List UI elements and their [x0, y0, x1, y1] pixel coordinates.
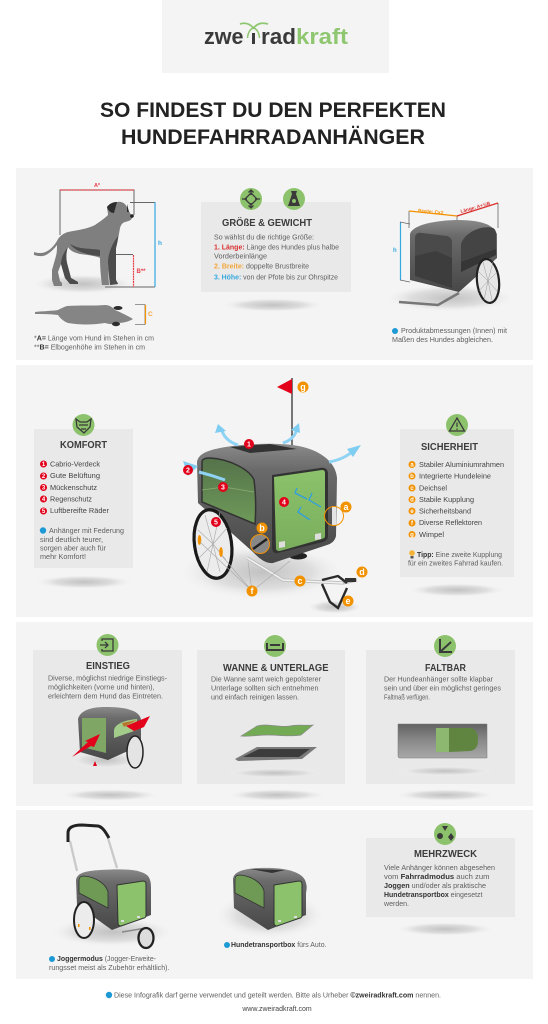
jogger mode trailer: [50, 825, 174, 948]
comfort list: [40, 460, 110, 515]
comfort box: [34, 414, 133, 568]
safety list: b: [410, 474, 414, 480]
dog body: [34, 202, 132, 286]
text: Unterlage sollten sich entnehmen: [211, 684, 318, 692]
size instructions: So wählst du die richtige Größe:: [214, 232, 314, 242]
comfort list: 2: [42, 474, 46, 480]
safety list: [408, 460, 504, 539]
letter markers: c: [297, 576, 303, 586]
heading: FALTBAR: [425, 662, 466, 674]
trailer with dimensions: [384, 200, 516, 312]
dog side view with measurements: [31, 183, 162, 294]
side mesh window: [202, 458, 256, 524]
letter markers: g: [300, 382, 306, 392]
pad: [241, 725, 313, 736]
note: suspension: Anhänger mit Federung: [49, 526, 124, 535]
title: HUNDEFAHRRADANHÄNGER: [121, 126, 425, 149]
safety list: Integrierte Hundeleine: [419, 472, 491, 480]
dog side view with measurements: h: [158, 240, 162, 247]
text: Faltmaß verfügen.: [384, 692, 430, 702]
text: sein und über ein möglichst geringes: [384, 684, 501, 692]
tip: [408, 550, 503, 568]
safety list: e: [410, 509, 414, 515]
note: suspension: [40, 526, 124, 561]
number markers: [183, 439, 289, 527]
text: Hundetransportbox eingesetzt: [384, 890, 483, 899]
note: suspension: mehr Komfort!: [40, 552, 86, 561]
safety box: [400, 414, 514, 577]
note: jogger mode: rungsset meist als Zubehör erhältlich).: [49, 963, 170, 972]
number markers: 1: [247, 442, 251, 448]
note: jogger mode: [49, 954, 170, 972]
icon: warning: [446, 414, 468, 436]
text: [383, 863, 495, 908]
text: [48, 674, 168, 700]
letter markers: b: [259, 523, 265, 533]
text: [211, 674, 322, 702]
safety list: d: [410, 498, 414, 504]
heading: EINSTIEG: [86, 660, 130, 672]
size instructions: 2. Breite: doppelte Brustbreite: [214, 262, 309, 270]
icon: entry: [96, 634, 118, 656]
shadow under safety box: [407, 583, 507, 597]
card: foldable: [366, 635, 515, 784]
safety list: Diverse Reflektoren: [419, 518, 482, 527]
title: [100, 99, 446, 149]
comfort list: Gute Belüftung: [50, 471, 100, 480]
shadow inside tub card: [225, 768, 325, 778]
folded trailer: [398, 724, 487, 758]
trailer with entry arrows: [69, 707, 150, 769]
measurement footnotes: **B= Elbogenhöhe im Stehen in cm: [34, 342, 145, 352]
text: werden.: [383, 899, 409, 908]
letter markers: f: [250, 586, 254, 596]
safety list: Sicherheitsband: [419, 506, 471, 516]
size instructions: Vorderbeinlänge: [214, 252, 267, 260]
aluminium frame detail: [332, 507, 336, 525]
note: product dimensions: Produktabmessungen (Innen) mit: [401, 326, 507, 335]
shadow under foldable card: [395, 789, 495, 801]
text: vom Fahrradmodus auch zum: [384, 872, 490, 881]
safety list: Stabile Kupplung: [419, 495, 474, 504]
comfort list: 4: [42, 497, 46, 503]
tip: für ein zweites Fahrrad kaufen.: [408, 558, 503, 568]
letter markers: e: [345, 596, 351, 606]
text: erleichtern dem Hund das Eintreten.: [48, 692, 163, 700]
safety list: a: [410, 462, 414, 468]
note: jogger mode: Joggermodus (Jogger-Erweite-: [57, 954, 157, 963]
trailer with dimensions: Breite: Cx2: [418, 208, 444, 216]
front rain cover: [272, 468, 328, 553]
note: product dimensions: [392, 326, 507, 344]
transport box trailer: [214, 868, 326, 939]
safety list: g: [410, 532, 414, 538]
note: suspension: sorgen aber auch für: [40, 544, 107, 552]
note: transport box: Hundetransportbox fürs Auto.: [231, 940, 326, 949]
letter markers: a: [343, 502, 349, 512]
pennant: [277, 378, 292, 445]
text: möglichkeiten (vorne und hinten),: [48, 682, 154, 692]
info box: size and weight: [201, 188, 351, 292]
comfort list: Luftbereifte Räder: [50, 506, 110, 515]
safety list: Deichsel: [419, 484, 447, 492]
measurement footnotes: [34, 334, 154, 352]
icon: weight: [283, 188, 305, 210]
airflow arrows: [199, 428, 354, 480]
text: [384, 674, 501, 702]
size instructions: [214, 232, 339, 282]
text: Joggen und/oder als praktische: [384, 881, 486, 890]
icon: fold: [434, 635, 456, 657]
reflectors: [198, 535, 223, 557]
heading: MEHRZWECK: [414, 848, 477, 860]
comfort list: Cabrio-Verdeck: [50, 460, 100, 468]
text: und einfach reinigen lassen.: [211, 692, 299, 702]
dog top view with width: C: [148, 311, 153, 318]
panel: entry, tub, foldable: [16, 622, 533, 806]
icon: dog face: [72, 414, 94, 436]
comfort list: 5: [42, 509, 46, 515]
safety list: f: [411, 521, 414, 527]
safety list: Stabiler Aluminiumrahmen: [419, 460, 504, 469]
logo wordmark: kraft: [296, 24, 349, 49]
shadow under tub card: [227, 789, 327, 801]
comfort list: 1: [42, 462, 46, 468]
card: entry: [33, 634, 182, 784]
footer url: www.zweiradkraft.com: [241, 1004, 312, 1013]
panel: comfort and safety: [16, 365, 533, 617]
safety list: Wimpel: [419, 530, 444, 539]
shadow under comfort box: [34, 575, 134, 589]
note: product dimensions: Maßen des Hundes abgleichen.: [392, 335, 493, 344]
text: Der Hundeanhänger sollte klapbar: [384, 674, 494, 684]
reflector pointer lines: [200, 542, 290, 591]
logo panel: [162, 0, 389, 73]
tub: [235, 747, 317, 761]
logo handlebar icon: [240, 23, 268, 44]
title: SO FINDEST DU DEN PERFEKTEN: [100, 99, 446, 122]
logo wordmark: rad: [261, 24, 296, 49]
heading: KOMFORT: [60, 439, 108, 451]
icon: shapes: [434, 823, 456, 845]
main trailer illustration: [178, 378, 368, 614]
panel: multipurpose: [16, 810, 533, 979]
note: suspension: sind deutlich teurer,: [40, 535, 103, 544]
icon: arrows: [240, 188, 262, 210]
multipurpose box: [366, 823, 515, 917]
logo wordmark: zwe: [204, 24, 244, 49]
panel: size and weight: [16, 168, 533, 360]
shadow under box: [221, 298, 325, 312]
heading: WANNE & UNTERLAGE: [223, 662, 328, 674]
comfort list: Regenschutz: [50, 494, 92, 504]
letter markers: [246, 382, 368, 606]
text: Diverse, möglichst niedrige Einstiegs-: [48, 674, 168, 682]
heading: SICHERHEIT: [421, 441, 479, 453]
drawbar and harness: [247, 558, 357, 608]
card: tub and pad: [197, 635, 345, 784]
number markers: 5: [214, 520, 218, 526]
letter markers: d: [359, 567, 365, 577]
comfort list: 3: [42, 486, 46, 492]
shadow under folded trailer: [395, 766, 495, 776]
dog side view with measurements: B**: [136, 269, 146, 275]
rain arrows: [295, 488, 321, 520]
trailer with dimensions: Länge: A+½B: [460, 200, 491, 215]
logo wordmark: [204, 24, 349, 49]
dog side view with measurements: A*: [94, 183, 101, 189]
roof hatch: [230, 444, 297, 453]
text: Die Wanne samt weich gepolsterer: [211, 674, 322, 684]
number markers: 2: [186, 468, 190, 474]
dog top view with width: [35, 304, 153, 326]
comfort list: Mückenschutz: [50, 483, 97, 492]
shadow under entry card: [60, 789, 160, 801]
measurement footnotes: *A= Länge vom Hund im Stehen in cm: [34, 334, 154, 342]
number markers: 3: [221, 484, 225, 492]
trailer with dimensions: h: [393, 248, 397, 254]
size instructions: 1. Länge: Länge des Hundes plus halbe: [214, 242, 339, 252]
number markers: 4: [282, 500, 286, 506]
icon: tub: [264, 635, 286, 657]
dog shading: [61, 236, 118, 285]
text: Viele Anhänger können abgesehen: [384, 863, 495, 872]
footer note: Diese Infografik darf gerne verwendet und geteilt werden. Bitte als Urheber ©zweiradkraft.com nennen.: [114, 990, 441, 1000]
rear wheel: [190, 507, 236, 581]
heading: GRÖßE & GEWICHT: [222, 216, 313, 229]
tip: Tipp: Eine zweite Kupplung: [417, 550, 502, 559]
size instructions: 3. Höhe: von der Pfote bis zur Ohrspitze: [214, 272, 338, 282]
trailer body: [197, 444, 337, 563]
safety list: c: [410, 486, 414, 492]
shadow under multipurpose box: [395, 922, 495, 936]
